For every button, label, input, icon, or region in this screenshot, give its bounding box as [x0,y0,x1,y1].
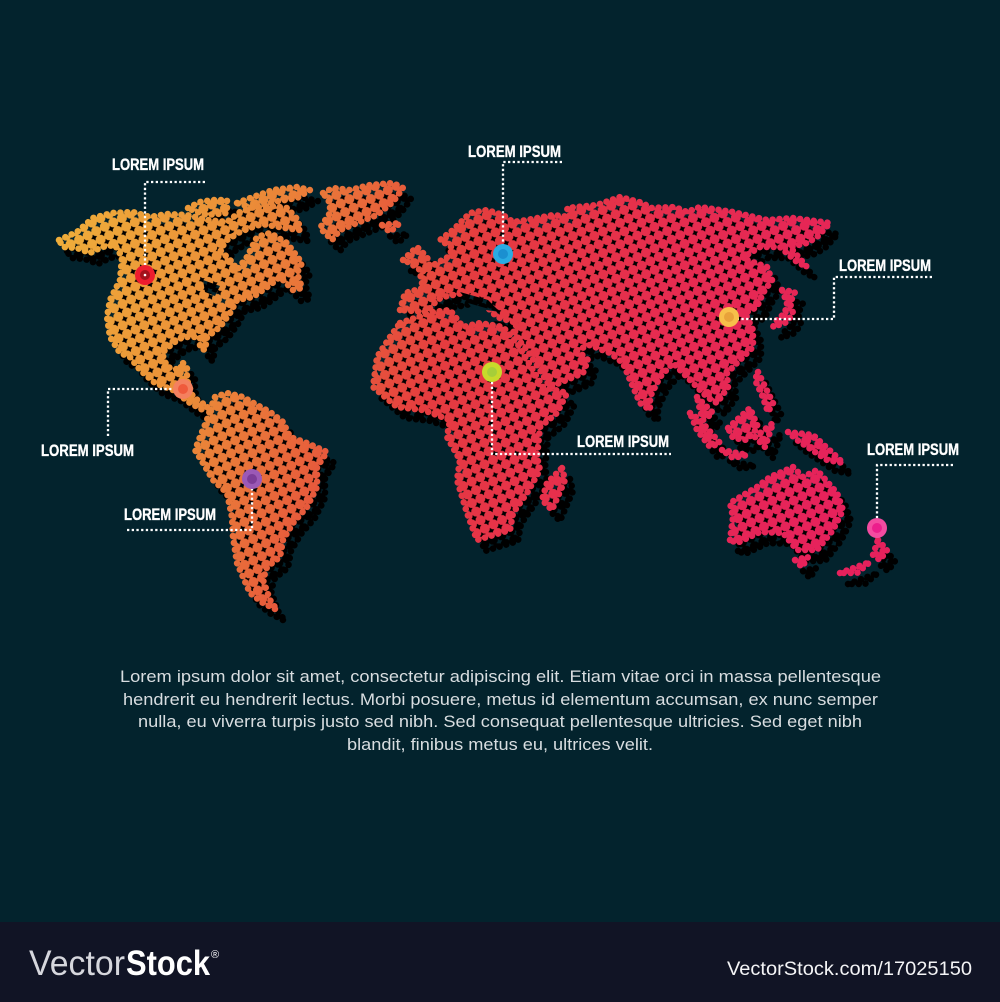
leader line [127,489,252,530]
callout: East Asia [719,256,932,327]
leader line [877,465,953,519]
callout: Europe [468,142,562,264]
callout: South America [124,469,262,530]
leader line [145,182,205,275]
leader line [738,277,932,319]
marker [242,469,262,489]
label: LOREM IPSUM [839,256,931,275]
marker [867,518,887,538]
description paragraph [120,668,881,754]
marker [482,362,502,382]
VectorStock logo: Stock [126,944,210,983]
footer bar [0,922,1000,1002]
description paragraph: nulla, eu viverra turpis justo sed nibh. Sed consequat pellentesque ultricies. Sed eget nibh [138,713,862,731]
marker [493,244,513,264]
label: LOREM IPSUM [112,155,204,174]
VectorStock logo [29,944,219,983]
marker [135,265,155,285]
callout: Africa [482,362,671,454]
label: LOREM IPSUM [124,505,216,524]
leader line [108,389,173,436]
leader line [492,382,671,454]
label: LOREM IPSUM [41,441,134,460]
dotted continents with gradient [56,180,890,612]
image id: VectorStock.com/17025150 [727,959,972,980]
callout: Central America [41,379,193,460]
callout: North America [112,155,205,285]
callout: Oceania [867,440,959,538]
description paragraph: Lorem ipsum dolor sit amet, consectetur adipiscing elit. Etiam vitae orci in massa pellentesque [120,668,881,686]
VectorStock logo: Vector [29,944,125,983]
label: LOREM IPSUM [867,440,959,459]
marker [173,379,193,399]
VectorStock logo: ® [211,949,219,961]
label: LOREM IPSUM [577,432,669,451]
map drop shadow [64,192,898,624]
world map [56,180,898,624]
marker [719,307,739,327]
leader line [503,162,562,245]
description paragraph: blandit, finibus metus eu, ultrices velit. [347,736,653,754]
description paragraph: hendrerit eu hendrerit lectus. Morbi posuere, metus id elementum accumsan, ex nunc semper [123,691,879,709]
label: LOREM IPSUM [468,142,561,161]
